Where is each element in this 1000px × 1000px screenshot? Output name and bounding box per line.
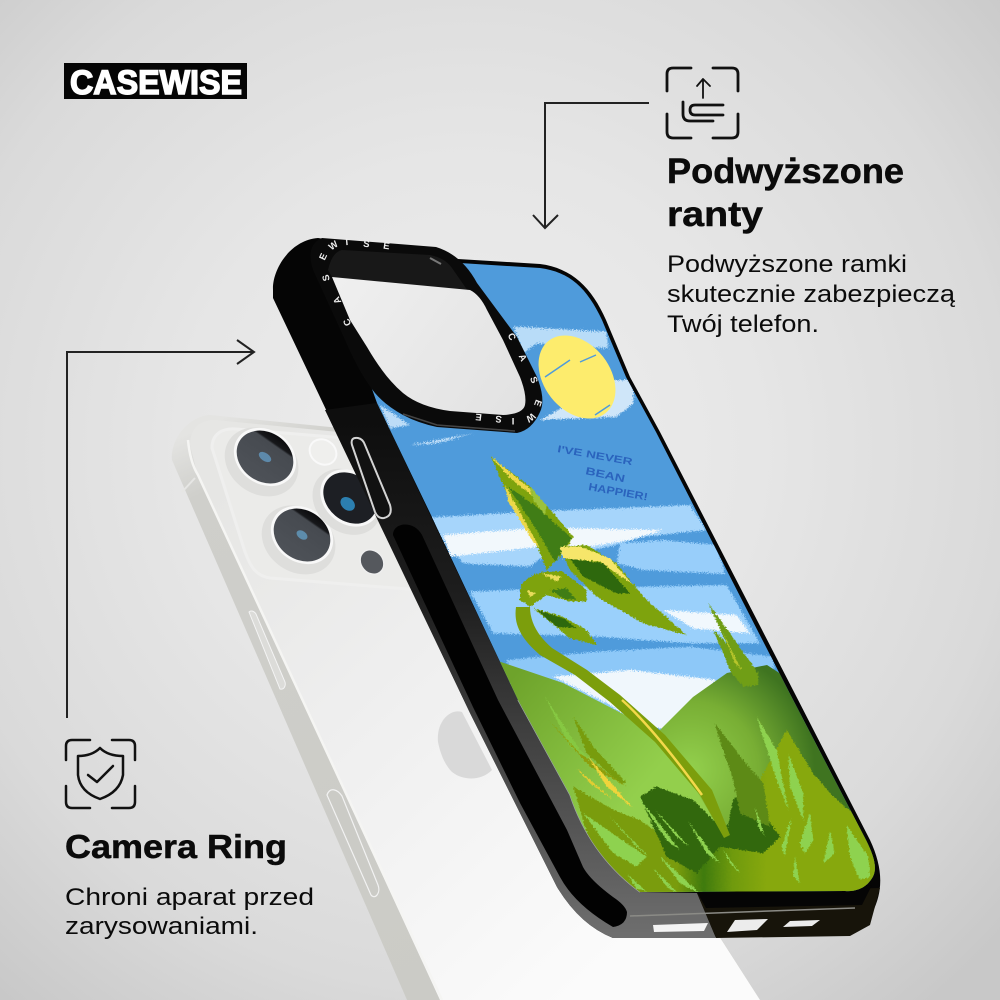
text: raised edges description — [667, 251, 955, 338]
lower leaf shading — [537, 610, 577, 628]
plant: stem — [516, 607, 730, 838]
grass base — [573, 730, 877, 900]
upper leaf light patch — [530, 487, 547, 515]
ring lettering: W — [327, 239, 340, 253]
sun streaks — [545, 355, 610, 415]
upper leaf — [491, 457, 573, 570]
camera opening — [332, 277, 525, 415]
heading: raised edges — [667, 151, 904, 234]
upper leaf yellow edge — [491, 457, 540, 548]
phone rim — [172, 415, 760, 1000]
text: camera ring description — [65, 884, 314, 940]
ring lettering: S — [527, 375, 540, 385]
icon: shield — [66, 740, 135, 808]
bottom case section right of the phone edge — [697, 888, 880, 938]
knot — [520, 571, 587, 607]
ring lettering: E — [531, 398, 544, 408]
protective case — [273, 238, 880, 938]
ring lettering: C — [341, 317, 354, 327]
ring lettering — [317, 237, 544, 426]
ring lettering: E — [382, 241, 390, 252]
port: charging — [653, 923, 708, 932]
bezel highlight — [518, 700, 640, 892]
right leaf yellow edge — [560, 547, 633, 585]
slogan: BEAN — [584, 465, 626, 485]
dark grass patch — [573, 717, 780, 873]
lens: right — [299, 454, 395, 549]
right leaf — [560, 545, 687, 635]
text: raised edges description: skutecznie zabezpieczą — [667, 281, 955, 308]
ring lettering: S — [495, 413, 503, 424]
ring lettering: A — [516, 353, 529, 363]
stem highlight — [622, 700, 702, 795]
upper grass tuft — [708, 603, 758, 687]
grass blades — [545, 697, 870, 895]
clouds near sun — [380, 327, 633, 445]
white iPhone behind the case — [172, 413, 760, 1000]
phone back panel — [190, 420, 760, 1000]
upper leaf shading — [508, 487, 572, 562]
arrow: raised edges — [533, 103, 649, 228]
slogan: I'VE NEVER — [556, 444, 634, 468]
ring gloss — [430, 258, 441, 264]
volume button — [249, 611, 285, 689]
slogan — [556, 444, 649, 503]
rim glint — [182, 478, 195, 492]
ring lettering: S — [362, 239, 370, 250]
ring lettering: C — [505, 332, 518, 342]
camera plateau — [212, 429, 420, 590]
lens: lower — [248, 491, 349, 588]
hill: right — [660, 665, 875, 892]
ring frame — [310, 238, 542, 433]
heading: camera ring: Camera Ring — [65, 828, 287, 865]
text: camera ring description: zarysowaniami. — [65, 913, 258, 940]
text: raised edges description: Podwyższone ramki — [667, 251, 907, 278]
sun — [538, 336, 616, 418]
port: speaker — [727, 919, 768, 932]
port: microphone — [783, 920, 820, 927]
power button — [327, 790, 379, 897]
ring lower gloss — [403, 414, 515, 431]
grey lower side and bezel — [325, 403, 716, 938]
case body — [273, 238, 880, 938]
ring lettering: S — [320, 273, 333, 282]
text: camera ring description: Chroni aparat przed — [65, 884, 314, 911]
case artwork: screen — [372, 263, 875, 892]
logo wordmark: CASEWISE — [70, 64, 242, 102]
knot highlight — [527, 573, 562, 597]
sensor — [355, 545, 389, 579]
apple logo — [438, 711, 492, 778]
side slot — [393, 524, 627, 927]
clouds — [430, 505, 777, 730]
heading: raised edges: ranty — [667, 194, 763, 234]
ring lettering: I — [345, 237, 349, 248]
arrow: camera ring — [67, 340, 254, 718]
flash — [305, 434, 341, 470]
side button — [352, 438, 391, 518]
sky — [372, 263, 875, 892]
knot shading — [550, 588, 577, 600]
lens: main — [211, 413, 312, 510]
edge highlight — [188, 440, 442, 1000]
bottom edge highlight — [630, 908, 855, 916]
black upper bottom band — [697, 885, 872, 908]
icon: raised edges — [667, 68, 738, 138]
text: raised edges description: Twój telefon. — [667, 311, 819, 338]
right leaf shading — [570, 558, 630, 593]
heading: raised edges: Podwyższone — [667, 151, 904, 191]
ring lettering: I — [512, 415, 514, 426]
ring inner wall — [328, 250, 468, 291]
logo plate — [64, 63, 247, 99]
slogan: HAPPIER! — [587, 481, 649, 503]
logo: CASEWISE — [64, 63, 247, 102]
ring lettering: A — [331, 295, 344, 305]
hill: left — [495, 660, 720, 900]
ring lettering: W — [524, 410, 537, 424]
ring lettering: E — [317, 252, 330, 262]
plant: leaves — [491, 457, 687, 645]
lower leaf — [533, 608, 597, 645]
camera ring — [310, 237, 544, 433]
ring lettering: E — [475, 411, 483, 422]
